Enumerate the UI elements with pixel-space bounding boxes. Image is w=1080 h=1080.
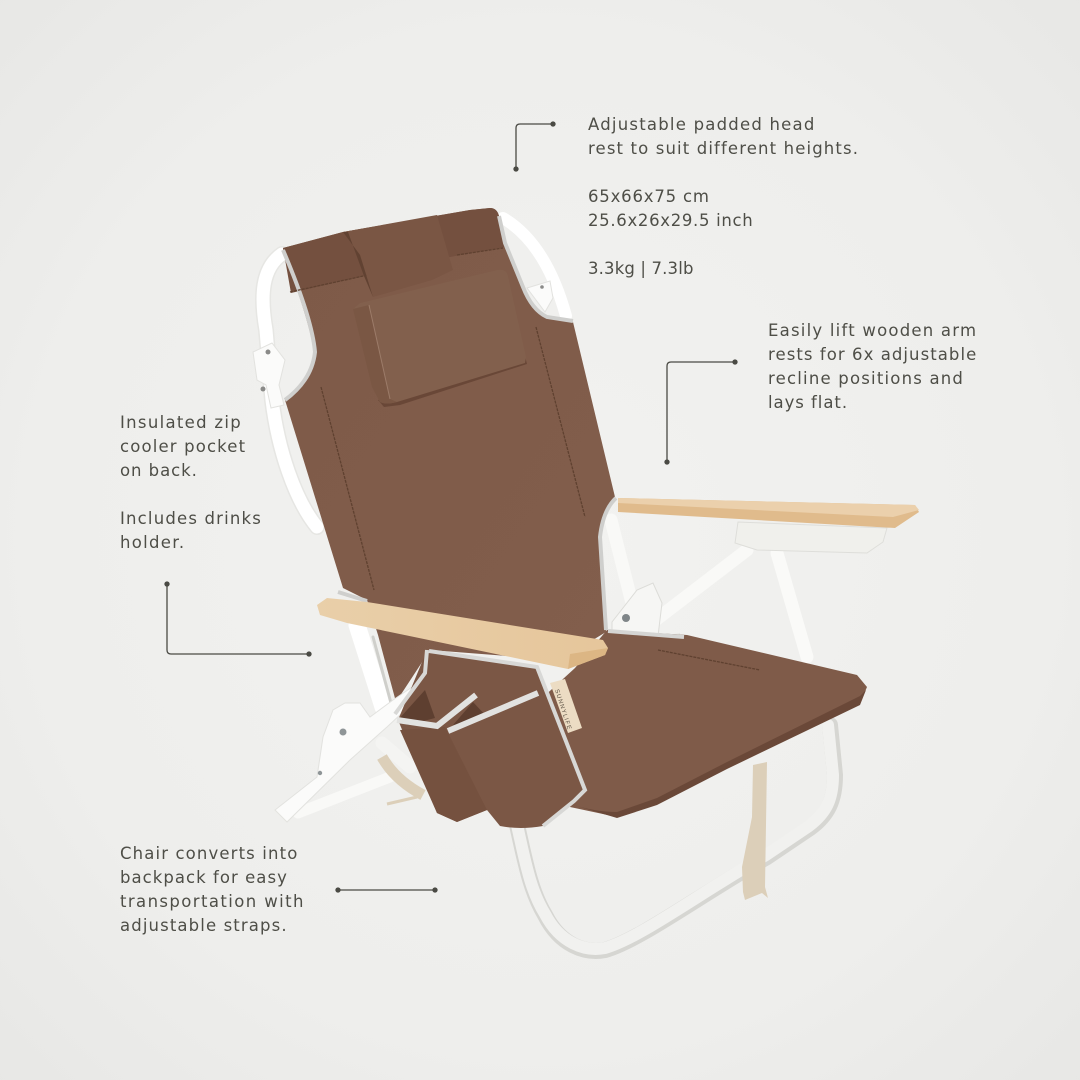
leader: backpack [336,888,437,892]
text: arm rests: lays flat. [768,393,848,412]
text: backpack: adjustable straps. [120,916,288,935]
text: arm rests: recline positions and [768,369,964,388]
text: head rest and dimensions: Adjustable padded head [588,115,816,134]
rear frame and legs [263,218,835,951]
drink holder binding [397,693,538,731]
text: head rest and dimensions: 3.3kg | 7.3lb [588,259,694,278]
text: cooler pocket [120,413,262,552]
leader: head rest [514,122,555,171]
right arm rest [618,498,919,528]
text: cooler pocket: holder. [120,533,185,552]
leader: cooler pocket [165,582,311,656]
label tag [550,679,582,733]
pocket shadow [400,727,487,822]
chair [253,208,919,951]
text: cooler pocket: Includes drinks [120,509,262,528]
seat cushion [540,630,867,817]
text: backpack [120,844,305,935]
pocket outer binding [395,650,585,826]
leader: arm rest [665,360,737,464]
front bracket [275,677,427,822]
hinge: back right [527,281,553,312]
text: arm rests: rests for 6x adjustable [768,345,977,364]
label tag: SUNNYLIFE [553,689,572,731]
text: head rest and dimensions: rest to suit different heights. [588,139,859,158]
text: cooler pocket: on back. [120,461,198,480]
text: cooler pocket: Insulated zip [120,413,242,432]
right arm bracket [735,522,887,553]
text: cooler pocket: cooler pocket [120,437,246,456]
text: backpack: transportation with [120,892,305,911]
pocket back panel [398,650,585,828]
left arm rest [317,598,608,669]
text: arm rests [768,321,977,412]
binding edges [283,216,616,630]
hinge: back left [253,343,285,408]
seams [290,248,585,590]
head rest strap [343,215,453,297]
head rest pillow [353,270,527,407]
text: head rest and dimensions: 25.6x26x29.5 inch [588,211,753,230]
text: backpack: Chair converts into [120,844,298,863]
straps [382,757,768,900]
top darker band [283,208,505,293]
pocket inner shadows [398,690,487,725]
text: backpack: backpack for easy [120,868,288,887]
text: head rest and dimensions: 65x66x75 cm [588,187,710,206]
hinge: right arm [612,583,680,638]
text: head rest and dimensions [588,115,859,278]
backrest fabric [283,208,615,702]
side pocket [395,650,585,828]
text: arm rests: Easily lift wooden arm [768,321,977,340]
